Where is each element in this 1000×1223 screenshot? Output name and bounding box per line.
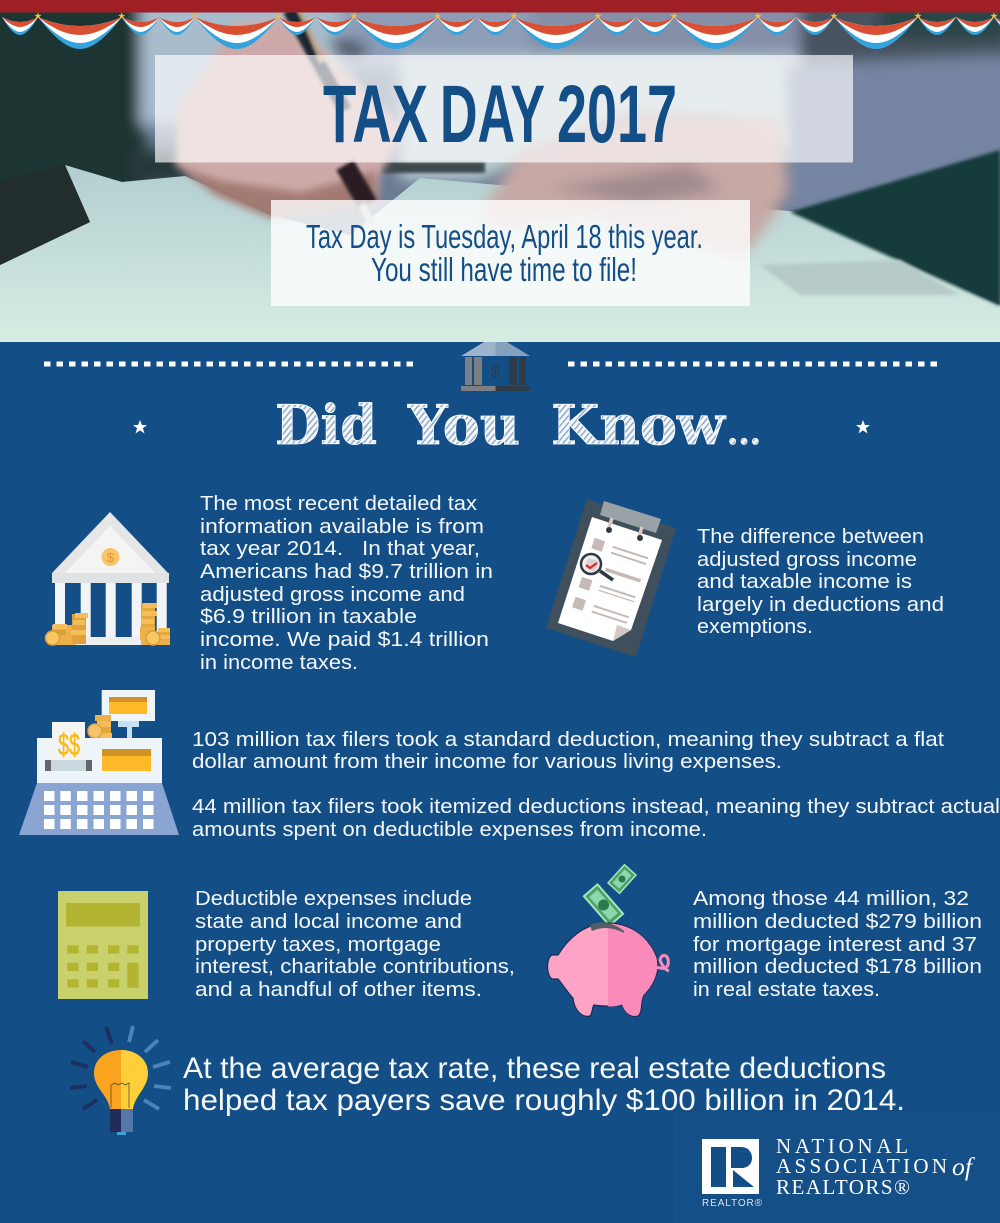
association name <box>776 1134 975 1199</box>
hero photo: hands signing a document <box>0 0 1000 342</box>
receipt: $$ <box>58 727 80 762</box>
text: agi vs taxable income: adjusted gross income <box>697 548 917 571</box>
text: standard and itemized deductions: dollar amount from their income for various living expenses. <box>192 750 782 773</box>
text: agi vs taxable income <box>697 525 944 638</box>
text: agi vs taxable income: largely in deductions and <box>697 593 944 616</box>
subtitle text <box>306 218 703 288</box>
dotted divider left <box>44 362 414 366</box>
icon: clipboard <box>546 499 676 657</box>
text: agi vs taxable income: exemptions. <box>697 615 813 638</box>
text: agi vs taxable income: and taxable income is <box>697 570 912 593</box>
star right <box>856 420 870 434</box>
magnifier <box>581 554 613 580</box>
icon: small bank <box>461 342 530 391</box>
dollar bills <box>583 864 637 927</box>
icon: bank with coins <box>46 512 170 645</box>
icon: calculator <box>58 891 148 999</box>
title text: 2017 <box>557 69 677 160</box>
icon: small bank: $ <box>491 364 500 381</box>
receipt <box>52 722 85 763</box>
text: mortgage and real estate deductions: in real estate taxes. <box>693 978 880 1001</box>
heading: did you know: You <box>407 393 520 457</box>
dotted divider right <box>568 362 938 366</box>
icon: cash register <box>19 690 179 835</box>
text: mortgage and real estate deductions: Among those 44 million, 32 <box>693 887 969 910</box>
star left <box>133 420 147 434</box>
coin stacks <box>46 603 170 645</box>
text: deductible expenses: state and local income and <box>195 910 462 933</box>
text: mortgage and real estate deductions <box>693 887 982 1001</box>
heading: did you know: Know <box>551 393 727 457</box>
swags <box>2 12 1000 49</box>
pig body <box>548 923 658 1016</box>
association name: ASSOCIATION <box>776 1154 947 1178</box>
dollar coin: $ <box>107 550 115 565</box>
text: closing statement: helped tax payers save roughly $100 billion in 2014. <box>183 1084 905 1117</box>
text: tax year 2014: $6.9 trillion in taxable <box>200 605 417 628</box>
coin slot <box>590 923 624 933</box>
text: tax year 2014: The most recent detailed tax <box>200 492 478 515</box>
realtor logo mark: REALTOR® <box>702 1198 763 1209</box>
panel: title <box>155 55 853 162</box>
text: standard and itemized deductions: 44 million tax filers took itemized deductions instead, meaning they subtract actual <box>192 795 1000 818</box>
text: deductible expenses <box>195 887 515 1001</box>
text: mortgage and real estate deductions: million deducted $178 billion <box>693 955 982 978</box>
association name: of <box>952 1154 975 1181</box>
footer logo panel <box>676 1114 1000 1223</box>
text: deductible expenses: interest, charitable contributions, <box>195 955 515 978</box>
text: mortgage and real estate deductions: for mortgage interest and 37 <box>693 933 977 956</box>
text: tax year 2014 <box>200 492 493 674</box>
text: standard and itemized deductions: amounts spent on deductible expenses from income. <box>192 818 707 841</box>
clipboard rings <box>606 518 643 541</box>
heading: did you know: Did <box>275 393 377 457</box>
text: tax year 2014: tax year 2014. In that year, <box>200 537 480 560</box>
association name: NATIONAL <box>776 1134 908 1158</box>
text: closing statement <box>183 1052 905 1117</box>
subtitle text: You still have time to file! <box>371 251 637 288</box>
association name: REALTORS® <box>776 1175 910 1199</box>
realtor logo mark <box>702 1139 763 1209</box>
text: tax year 2014: adjusted gross income and <box>200 583 465 606</box>
checklist items <box>572 538 649 625</box>
text: standard and itemized deductions: 103 million tax filers took a standard deduction, meaning they subtract a flat <box>192 728 944 751</box>
text: deductible expenses: and a handful of other items. <box>195 978 482 1001</box>
pig tail <box>656 955 669 971</box>
text: tax year 2014: in income taxes. <box>200 651 358 674</box>
text: closing statement: At the average tax rate, these real estate deductions <box>183 1052 886 1085</box>
register keys <box>44 791 154 829</box>
text: agi vs taxable income: The difference between <box>697 525 924 548</box>
panel: tax day date <box>271 200 750 306</box>
icon: piggy bank <box>548 864 669 1016</box>
bulb rays <box>70 1026 171 1109</box>
text: tax year 2014: information available is from <box>200 515 484 538</box>
bunting band <box>0 0 1000 49</box>
text: tax year 2014: income. We paid $1.4 trillion <box>200 628 489 651</box>
heading: did you know <box>275 393 761 457</box>
title text: DAY <box>440 69 545 160</box>
text: deductible expenses: property taxes, mortgage <box>195 933 441 956</box>
subtitle text: Tax Day is Tuesday, April 18 this year. <box>306 218 703 255</box>
red top bar <box>0 0 1000 12</box>
title text <box>323 69 677 160</box>
text: standard and itemized deductions <box>192 728 1000 841</box>
title text: TAX <box>323 69 428 160</box>
text: mortgage and real estate deductions: million deducted $279 billion <box>693 910 982 933</box>
heading: did you know: ... <box>727 413 761 453</box>
register coins <box>88 715 112 738</box>
text: deductible expenses: Deductible expenses include <box>195 887 472 910</box>
text: tax year 2014: Americans had $9.7 trillion in <box>200 560 493 583</box>
icon: light bulb <box>70 1026 171 1135</box>
